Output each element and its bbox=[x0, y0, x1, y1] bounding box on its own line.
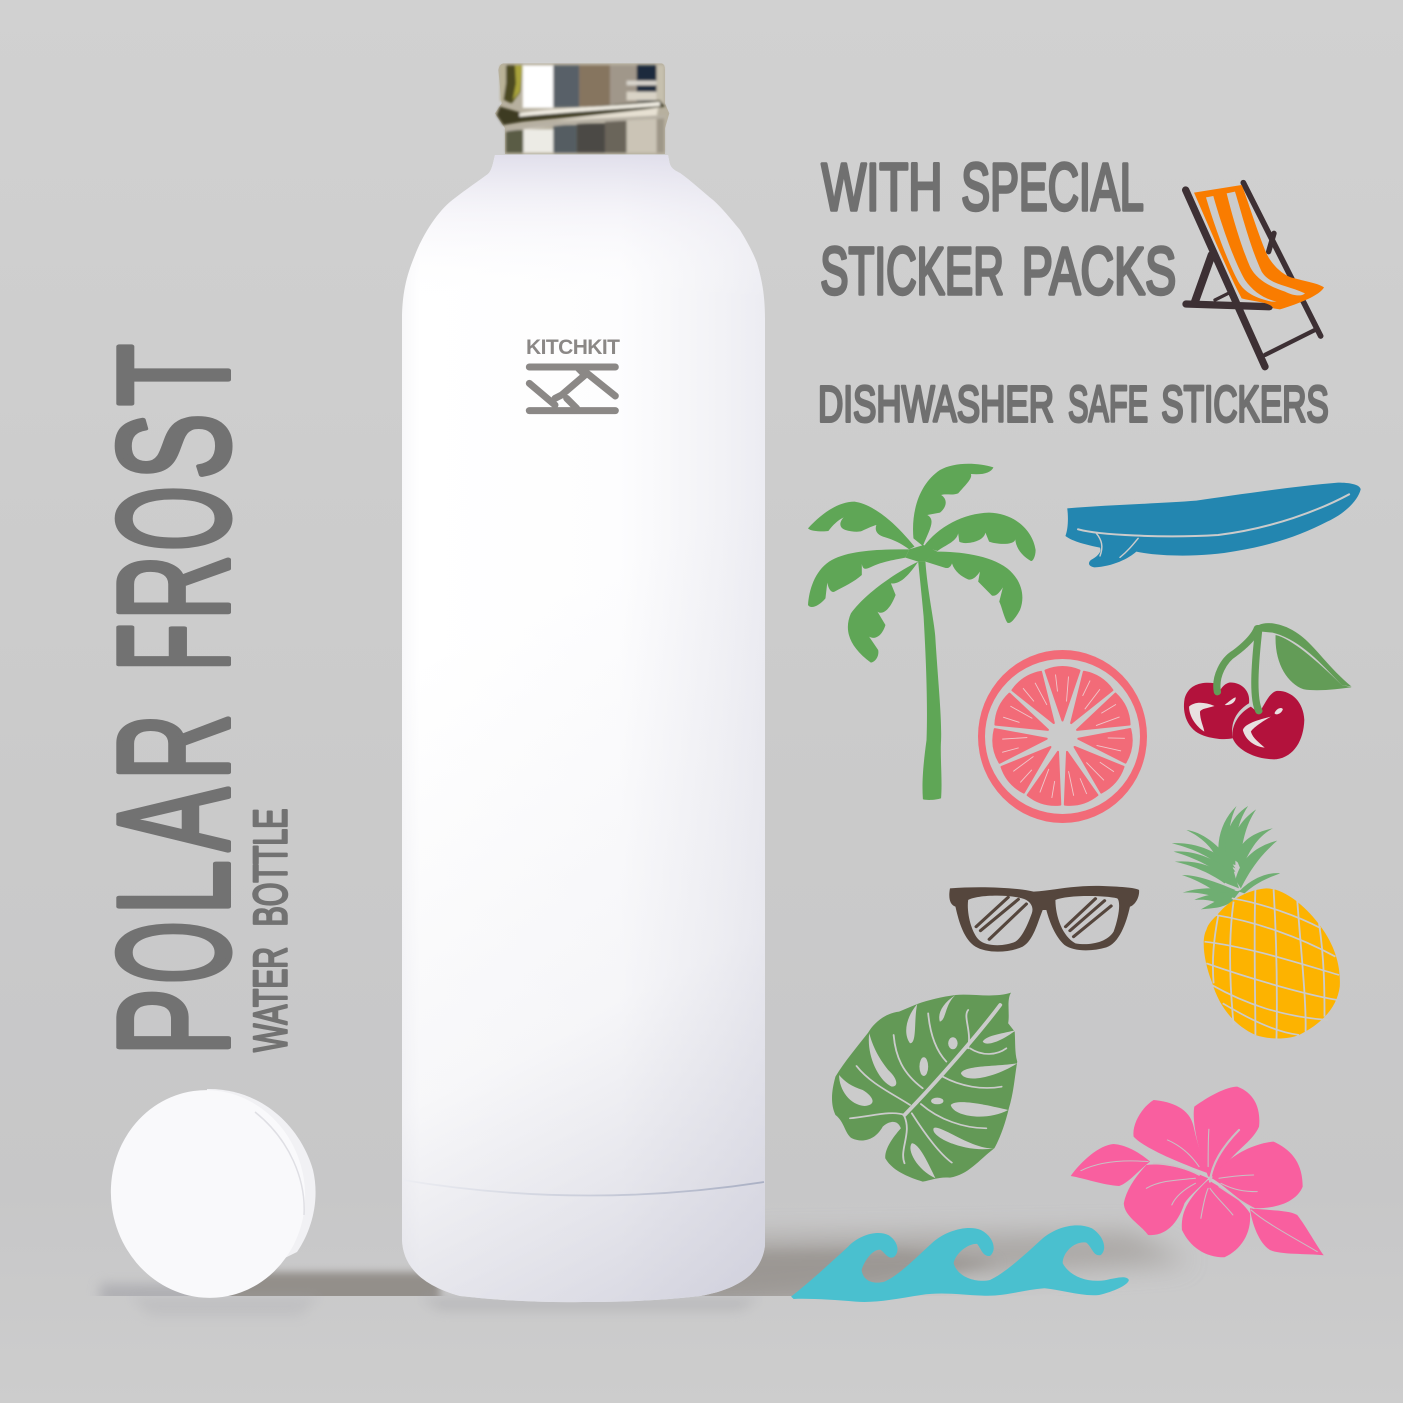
bottle bbox=[402, 63, 765, 1302]
sticker: surfboard bbox=[1065, 483, 1361, 567]
subtitle: WATER BOTTLE bbox=[244, 808, 297, 1052]
bottle body bbox=[402, 155, 765, 1302]
sticker: wave bbox=[791, 1225, 1129, 1302]
subheading: dishwasher safe stickers: DISHWASHER bbox=[818, 376, 1054, 432]
pineapple body bbox=[1204, 888, 1340, 1038]
sticker: sunglasses bbox=[949, 886, 1139, 952]
sticker: hibiscus flower bbox=[1071, 1087, 1324, 1257]
bottle base seam bbox=[403, 1180, 764, 1196]
title: POLAR FROST: L bbox=[86, 860, 262, 915]
subtitle: WATER BOTTLE: WATER bbox=[244, 947, 297, 1052]
sticker: palm tree bbox=[808, 464, 1036, 800]
heading: with special sticker packs: WITH bbox=[822, 150, 942, 225]
bottle neck: metal bbox=[495, 63, 669, 154]
bottle cap bbox=[97, 1078, 319, 1310]
sticker: grapefruit bbox=[978, 650, 1147, 823]
floor shadow bbox=[100, 1232, 1190, 1316]
heading: with special sticker packs: PACKS bbox=[1022, 234, 1176, 309]
sticker: cherries bbox=[1184, 623, 1352, 759]
title: POLAR FROST: R bbox=[86, 714, 262, 780]
sticker: deck chair bbox=[1186, 183, 1324, 367]
heading: with special sticker packs: STICKER bbox=[820, 234, 1004, 309]
logo: KITCHKIT: KITCHKIT bbox=[526, 336, 620, 359]
title: POLAR FROST bbox=[86, 344, 262, 1056]
heading: with special sticker packs: SPECIAL bbox=[961, 150, 1144, 225]
pineapple leaves bbox=[1172, 806, 1280, 909]
sticker: pineapple bbox=[1172, 806, 1340, 1039]
title: POLAR FROST: R bbox=[86, 555, 262, 620]
subheading: dishwasher safe stickers bbox=[818, 376, 1329, 432]
title: POLAR FROST: T bbox=[86, 344, 262, 406]
title: POLAR FROST: F bbox=[86, 624, 262, 671]
subheading: dishwasher safe stickers: SAFE bbox=[1068, 376, 1148, 432]
title: POLAR FROST: A bbox=[86, 788, 262, 851]
title: POLAR FROST: O bbox=[86, 921, 262, 984]
title: POLAR FROST: S bbox=[86, 414, 262, 480]
logo: KITCHKIT bbox=[526, 336, 620, 411]
title: POLAR FROST: P bbox=[86, 988, 262, 1056]
logo mark bbox=[529, 367, 615, 411]
heading: with special sticker packs bbox=[820, 150, 1176, 309]
sticker: monstera leaf bbox=[832, 993, 1017, 1182]
title: POLAR FROST: O bbox=[86, 486, 262, 551]
subtitle: WATER BOTTLE: BOTTLE bbox=[244, 808, 297, 927]
